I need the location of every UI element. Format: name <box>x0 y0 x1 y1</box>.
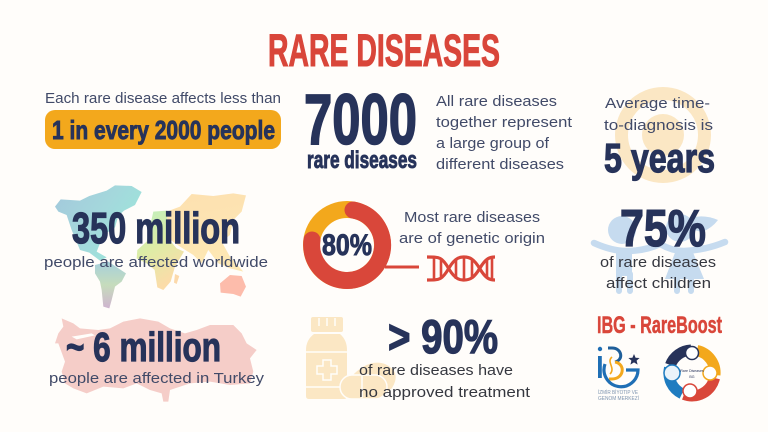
panel: 75% children <box>594 200 725 292</box>
panel: time to diagnosis: Average time- <box>605 95 710 112</box>
panel: 1 in every 2000: 1 in every 2000 people <box>52 115 275 145</box>
panel: 350 million <box>44 185 268 308</box>
panel: 90% no treatment: of rare diseases have <box>359 362 513 379</box>
panel: 80% genetic: 80% <box>322 229 372 262</box>
panel: 6 million Turkey <box>49 318 265 402</box>
panel: 6 million Turkey: people are affected in Turkey <box>49 370 265 387</box>
text: large group <box>436 93 573 173</box>
panel: time to diagnosis: 5 years <box>604 135 715 181</box>
panel: time to diagnosis <box>604 94 715 181</box>
logo: RareBoost wheel: BG <box>689 375 695 379</box>
text: large group: together represent <box>436 114 573 131</box>
panel: 350 million: 350 million <box>72 204 240 253</box>
panel: 7000 rare diseases: 7000 <box>304 81 417 160</box>
panel: IBG RareBoost <box>597 312 722 402</box>
connector line <box>385 266 419 268</box>
panel: time to diagnosis: to-diagnosis is <box>604 117 713 134</box>
panel: 80% genetic: Most rare diseases <box>404 209 540 226</box>
panel: 6 million Turkey: ~ 6 million <box>66 324 221 370</box>
logo: RareBoost wheel: Rare Diseases <box>680 369 704 373</box>
panel: 90% no treatment: no approved treatment <box>359 384 531 401</box>
panel: 90% no treatment <box>306 310 531 401</box>
icon: children <box>594 214 725 291</box>
panel: 75% children: 75% <box>620 200 706 258</box>
panel: 7000 rare diseases <box>304 81 417 174</box>
icon: target <box>622 94 704 176</box>
text: large group: All rare diseases <box>436 93 557 110</box>
icon: medicine bottle <box>306 317 396 399</box>
icon: DNA <box>427 257 495 280</box>
panel: 80% genetic <box>312 209 545 281</box>
map: Turkey <box>55 318 257 402</box>
map: world <box>55 185 246 308</box>
panel: 1 in every 2000: Each rare disease affects less than <box>45 90 281 107</box>
logo: IBG: İZMİR BİYOTIP VE <box>598 389 638 396</box>
panel: 75% children: of rare diseases <box>600 254 716 271</box>
panel: 90% no treatment: > 90% <box>388 310 498 363</box>
title: RARE DISEASES <box>268 25 500 76</box>
logo: IBG <box>598 347 640 402</box>
panel: 350 million: people are affected worldwide <box>44 254 268 271</box>
chart: donut <box>312 210 383 281</box>
logo: IBG: GENOM MERKEZİ <box>598 395 639 402</box>
panel: 7000 rare diseases: rare diseases <box>307 147 417 174</box>
text: large group: different diseases <box>436 156 564 173</box>
text: large group: a large group of <box>436 135 550 152</box>
panel: 1 in every 2000 <box>45 90 281 149</box>
panel: 75% children: affect children <box>606 275 711 292</box>
panel: 80% genetic: are of genetic origin <box>399 230 545 247</box>
logo: RareBoost wheel <box>664 346 717 398</box>
